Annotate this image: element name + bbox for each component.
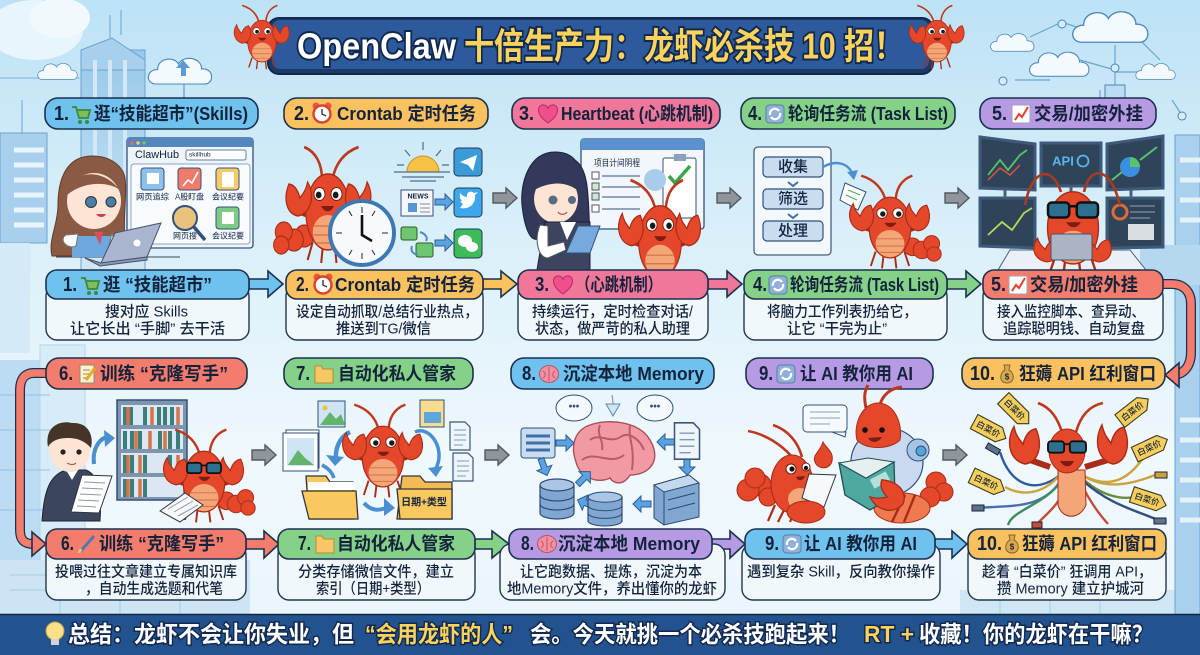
small lobster claw: [787, 501, 825, 523]
card: skill 5: 接入监控脚本、查异动、: [997, 304, 1145, 320]
schedule window: [581, 139, 704, 229]
laptop: [85, 223, 161, 266]
arrow: card 2 to 3: [483, 271, 517, 297]
arrow: connector 5 to 10: [1163, 284, 1191, 387]
sunglasses: [1048, 202, 1098, 218]
arrow: scene 4 to 5: [945, 188, 969, 208]
card: skill 2: 设定自动抓取/总结行业热点，: [296, 302, 478, 320]
arrow: card 9 to 10: [935, 531, 967, 558]
doc: [674, 423, 700, 459]
browser window: 网页搜: [173, 230, 197, 240]
browser window: 会议纪要: [212, 192, 244, 202]
tablet: [566, 226, 600, 253]
folder left: [302, 476, 358, 519]
icon: telegram: [454, 148, 482, 176]
lobster head: [1049, 429, 1085, 473]
speech bubble: [803, 405, 847, 437]
arrow: card 3 to 4: [708, 271, 742, 297]
card: skill 7: 索引（日期+类型）: [316, 580, 430, 598]
arrow: card 4 to 5: [947, 271, 981, 297]
card: skill 5: [983, 270, 1163, 340]
heading: skill 10: 狂薅 API 红利窗口: [1019, 363, 1156, 384]
illustration: girl browsing ClawHub: [51, 138, 253, 266]
browser window: [127, 138, 253, 248]
arrow: card 6 to 7: [246, 531, 279, 558]
card: skill 6: 投喂过往文章建立专属知识库: [55, 562, 237, 580]
card: skill 10: 狂薅 API 红利窗口: [1022, 533, 1157, 554]
card: skill 9: 9.: [765, 533, 779, 555]
card: skill 7: 7.: [298, 533, 311, 555]
folder right: [397, 476, 452, 519]
footer text: 收藏！你的龙虾在干嘛？: [919, 621, 1153, 647]
heading: skill 9: 9.: [759, 363, 773, 385]
lobster: [343, 405, 422, 497]
card: skill 2: 推送到TG/微信: [336, 320, 431, 338]
card: skill 3: 持续运行，定时检查对话/: [532, 302, 694, 320]
card: skill 6: ，自动生成选题和代笔: [85, 580, 223, 598]
sunglasses: [1048, 441, 1086, 453]
browser window: ClawHub: [135, 149, 179, 161]
flow panel: 处理: [778, 222, 808, 240]
card: skill 10: 趁着 “白菜价” 狂调用 API，: [982, 562, 1152, 580]
heading: skill 7: 7.: [296, 363, 310, 385]
card: skill 8: [500, 529, 725, 600]
note: [840, 183, 866, 210]
laptop: [1051, 234, 1092, 260]
small lobster: [737, 425, 813, 522]
heading: skill 3: [512, 98, 720, 129]
browser window: 会议纪要: [212, 230, 244, 240]
flow panel: 筛选: [778, 190, 808, 208]
heading: skill 4: [741, 98, 955, 129]
icon: light bulb: [46, 622, 64, 645]
card: skill 5: 追踪聪明钱、自动复盘: [1003, 320, 1145, 338]
illustration: lobster with clock and feeds: [274, 142, 482, 265]
card: skill 3: 3.: [535, 274, 549, 296]
card: skill 4: [744, 270, 947, 340]
footer text: [68, 621, 1153, 647]
arrow: connector 6 to 6: [20, 373, 46, 556]
heading: skill 8: 沉淀本地 Memory: [563, 363, 704, 384]
arms: [1030, 460, 1108, 467]
paper: [802, 474, 836, 507]
heading: skill 5: 交易/加密外挂: [1034, 103, 1143, 124]
illustration: lobsters teaching: [737, 385, 953, 523]
heading: skill 3: 3.: [519, 103, 534, 125]
heading: skill 7: 自动化私人管家: [338, 363, 456, 384]
price tags: [998, 393, 1034, 429]
server: [654, 475, 699, 525]
photo: [318, 401, 345, 427]
clock: [330, 201, 394, 265]
card: skill 3: 状态，做严苛的私人助理: [535, 320, 690, 338]
browser window: skillhub: [189, 152, 211, 158]
heading: skill 4: 4.: [748, 103, 762, 125]
photo stack: [283, 430, 319, 471]
illustration: trading monitors: [980, 136, 1163, 276]
claw left: [1010, 427, 1039, 464]
card: skill 2: [286, 270, 483, 340]
card: skill 10: 10.: [977, 533, 1002, 555]
arrow: scene 7 to 8: [485, 445, 509, 465]
card: skill 3: （心跳机制）: [576, 275, 662, 295]
footer text: “会用龙虾的人”: [365, 621, 513, 647]
card: skill 7: 分类存储微信文件，建立: [298, 562, 454, 580]
schedule window: 项目计间阴程: [594, 157, 640, 168]
illustration: lobster with API cables: [968, 393, 1171, 528]
card: skill 7: 自动化私人管家: [337, 533, 455, 554]
card: skill 8: 8.: [521, 533, 534, 555]
heading: skill 5: [980, 98, 1156, 129]
illustration: task list and lobster: [754, 147, 941, 268]
brain: [574, 422, 655, 483]
clipboard: [644, 154, 696, 218]
card: skill 2: 2.: [296, 274, 309, 296]
card: skill 9: [742, 529, 940, 600]
icon: news: [401, 190, 433, 216]
lobster body: [1058, 470, 1086, 516]
card: skill 7: [278, 529, 475, 600]
footer text: 会。今天就挑一个必杀技跑起来！: [530, 621, 850, 647]
illustration: trading monitors: API: [1052, 154, 1074, 168]
arrow: scene 6 to 7: [252, 445, 276, 465]
card: skill 1: 搜对应 Skills: [105, 302, 188, 320]
browser window: A股盯盘: [175, 192, 204, 202]
file: [420, 400, 444, 427]
card: skill 2: Crontab 定时任务: [335, 274, 475, 295]
heading: skill 2: 2.: [294, 103, 309, 125]
arrow: card 7 to 8: [475, 531, 509, 558]
sun: [394, 142, 450, 181]
heading: skill 10: 10.: [970, 363, 995, 385]
heading: skill 7: [284, 358, 473, 389]
icon: lobster right of title: [909, 5, 964, 69]
card: skill 9: 让 AI 教你用 AI: [804, 534, 917, 554]
arrow: scene 3 to 4: [717, 188, 741, 208]
arrow: card 8 to 9: [712, 531, 745, 558]
icon: twitter: [454, 188, 482, 217]
footer text: 总结：龙虾不会让你失业，但: [68, 621, 354, 647]
title banner: [268, 18, 933, 74]
database right: [588, 492, 622, 526]
heading: skill 10: [962, 358, 1165, 389]
bubble right: [637, 395, 673, 421]
man: [42, 422, 112, 521]
card: skill 1: 逛 “技能超市”: [103, 274, 212, 295]
robot claw: [868, 476, 910, 517]
icon: lobster left of title: [234, 5, 289, 69]
heading: skill 1: [45, 98, 258, 129]
robot lobster tail: [874, 472, 953, 523]
browser window: 网页追综: [136, 192, 169, 202]
heading: skill 6: 6.: [59, 363, 73, 385]
database left: [540, 479, 574, 519]
card: skill 4: 让它 “干完为止”: [787, 320, 887, 338]
card: skill 4: 4.: [753, 274, 767, 296]
claw right: [1098, 425, 1127, 464]
illustration: writer and bookshelf: [42, 400, 255, 522]
title text: OpenClaw: [297, 26, 457, 66]
icon: wechat: [454, 229, 482, 258]
card: skill 9: 遇到复杂 Skill，反向教你操作: [747, 564, 935, 580]
card: skill 8: 地Memory文件，养出懂你的龙虾: [507, 580, 717, 598]
heading: skill 8: [511, 358, 714, 389]
illustration: schedule window and assistant: [522, 139, 704, 290]
arrow: card 1 to 2: [249, 271, 283, 297]
cables: [978, 452, 1158, 525]
desk: [998, 250, 1146, 270]
heading: skill 6: 训练 “克隆写手”: [100, 363, 228, 384]
lobster: [164, 430, 255, 522]
robot suit: [851, 428, 929, 496]
card: skill 4: 轮询任务流 (Task List): [790, 275, 939, 295]
footer banner: [0, 614, 1200, 655]
card: skill 6: [46, 529, 246, 600]
flow panel: [754, 147, 831, 255]
heading: skill 6: [46, 358, 247, 389]
card: skill 1: 让它长出 “手脚” 去干活: [70, 320, 225, 338]
card: skill 10: [968, 529, 1166, 600]
heading: skill 1: 逛“技能超市”(Skills): [94, 103, 248, 124]
bubble left: [556, 395, 592, 421]
arrow: scene 9 to 10: [943, 445, 967, 465]
antennae: [1038, 403, 1103, 432]
footer text: RT +: [864, 621, 914, 647]
lobster: [619, 180, 700, 290]
paper stack: [160, 493, 203, 522]
icon: chat bubbles: [401, 227, 433, 257]
heading: skill 2: Crontab 定时任务: [337, 103, 476, 124]
heading: skill 9: [746, 358, 933, 389]
antennae: [1025, 173, 1120, 205]
card: skill 5: 交易/加密外挂: [1030, 274, 1138, 295]
arrow: scene 2 to 3: [493, 188, 517, 208]
card: skill 1: 1.: [63, 274, 77, 296]
robot lobster head: [856, 385, 902, 448]
flow panel: 收集: [778, 158, 808, 176]
heading: skill 1: 1.: [54, 103, 69, 125]
pointing claw: [814, 442, 832, 468]
card: skill 6: 6.: [61, 533, 74, 555]
illustration: brain and memory: [521, 395, 700, 526]
claws: [1034, 238, 1111, 262]
icon: news: NEWS: [408, 194, 429, 200]
woman: [522, 152, 600, 270]
heading: skill 8: 8.: [522, 363, 536, 385]
heading: skill 2: [284, 98, 488, 129]
bubble right: •••: [650, 402, 661, 412]
card: skill 8: 沉淀本地 Memory: [558, 533, 700, 554]
heading: skill 5: 5.: [992, 103, 1007, 125]
card: skill 1: [46, 270, 249, 340]
panel: [521, 428, 555, 458]
folder right: 日期+类型: [401, 496, 447, 508]
title banner: 十倍生产力：龙虾必杀技 10 招！: [464, 26, 904, 66]
heading: skill 4: 轮询任务流 (Task List): [788, 104, 948, 124]
card: skill 4: 将脑力工作列表扔给它，: [767, 302, 917, 320]
card: skill 8: 让它跑数据、提炼，沉淀为本: [520, 562, 702, 580]
heading: skill 3: Heartbeat (心跳机制): [561, 104, 713, 124]
heading: skill 9: 让 AI 教你用 AI: [800, 364, 913, 384]
lobster: [850, 176, 941, 268]
glasses: [187, 463, 221, 473]
bookshelf: [117, 400, 187, 500]
lobster: [274, 147, 371, 263]
book: [839, 458, 895, 510]
card: skill 10: 攒 Memory 建立护城河: [997, 580, 1144, 598]
illustration: files and folders: [283, 400, 473, 519]
card: skill 3: [518, 270, 708, 340]
card: skill 6: 训练 “克隆写手”: [99, 533, 224, 554]
lobster: [1048, 192, 1098, 276]
card: skill 5: 5.: [991, 274, 1006, 296]
bubble left: •••: [569, 402, 580, 412]
